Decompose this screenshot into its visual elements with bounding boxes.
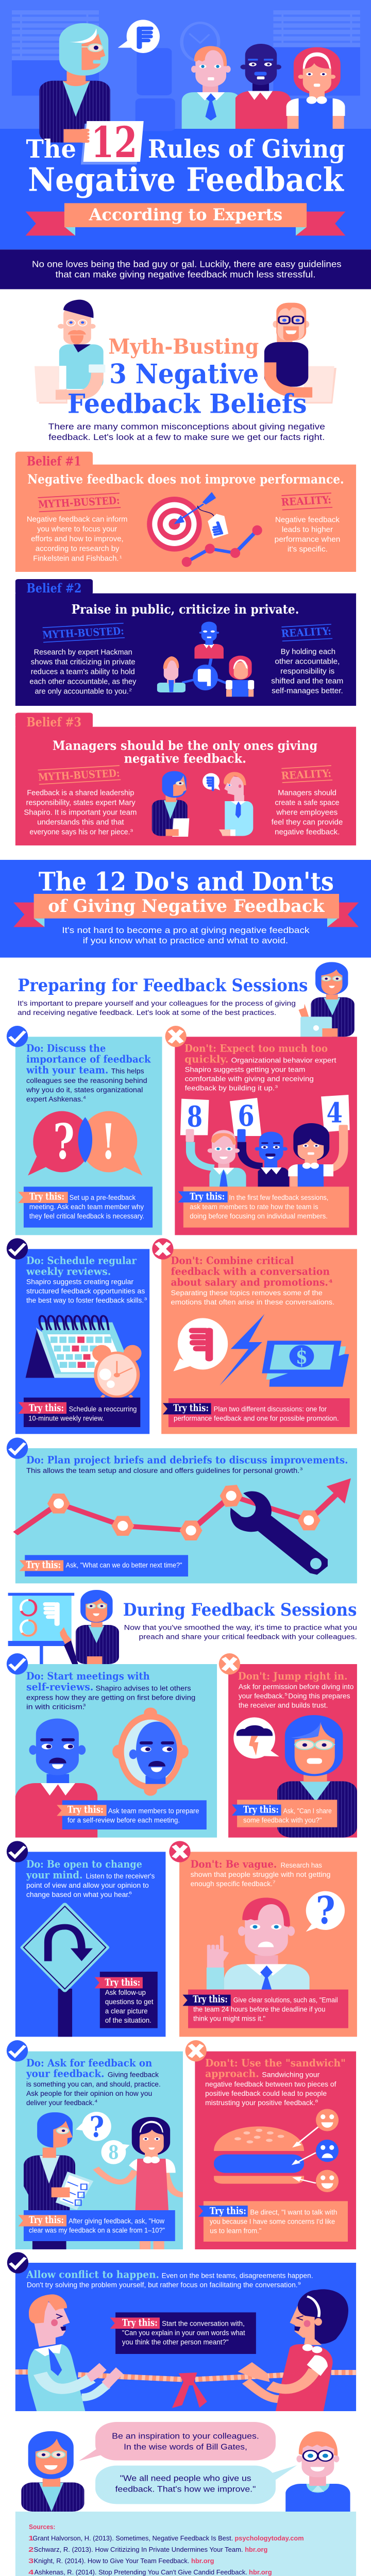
illustration: team and thumbs down <box>157 622 254 697</box>
icon: thumbs down, lightning and money: $ <box>296 1345 308 1369</box>
try this box <box>163 1398 350 1427</box>
card text: feedback by building it up. <box>185 1084 275 1092</box>
try this box: Ask team members to prepare <box>108 1807 199 1815</box>
try this box: Start the conversation with, <box>162 2319 245 2328</box>
card text: 3 <box>144 1297 147 1301</box>
illustration: manager talks with employee <box>152 771 253 837</box>
card text: Do: Discuss the <box>26 1042 106 1055</box>
card text: Research has <box>281 1861 322 1869</box>
card text: Shapiro suggests getting your team <box>185 1065 305 1074</box>
don't badge <box>165 1026 187 1047</box>
try this box: Try this: <box>210 2206 246 2217</box>
card text: Allow conflict to happen. <box>26 2268 159 2281</box>
card text: weekly reviews. <box>26 1265 111 1278</box>
don't badge <box>185 2040 207 2061</box>
reality text: leads to higher <box>282 525 333 534</box>
sources label: Sources: <box>29 2523 55 2531</box>
card text: Do: Ask for feedback on <box>26 2057 152 2069</box>
employee: woman with headband <box>286 47 345 129</box>
try this box: you think the other person meant?" <box>122 2338 229 2346</box>
reality text: where employees <box>276 808 338 817</box>
speech bubble: bill gates quote: "We all need people who give us <box>120 2474 251 2483</box>
card text: why you do it, states organizational <box>26 1086 143 1094</box>
preparing for feedback sessions <box>18 962 355 1039</box>
card text: positive feedback could lead to people <box>205 2090 327 2097</box>
section banner: do's and don'ts <box>0 860 371 958</box>
card text: Shapiro advises to let others <box>96 1684 191 1692</box>
manager with tablet <box>298 962 355 1039</box>
myth-busted text: 2 <box>129 688 132 692</box>
source list: Grant Halvorson, H. (2013). Sometimes, Negative Feedback Is Best. <box>32 2534 233 2542</box>
card text: 3 <box>83 1703 86 1707</box>
card text: 3 <box>300 1467 303 1471</box>
card text: deliver your feedback. <box>26 2099 94 2107</box>
card text <box>26 1858 155 1899</box>
myth-busted text: Shapiro. It is important your team <box>24 808 137 817</box>
card text: the receiver and builds trust. <box>239 1701 328 1709</box>
card text: is something you can, and should, practice. <box>26 2080 161 2088</box>
illustration: confused man <box>207 1888 345 1990</box>
icon: calendar <box>26 1316 133 1378</box>
myth-busted stamp <box>38 493 121 512</box>
card text: 5 <box>284 1692 288 1697</box>
source list: Schwarz, R. (2013). How Critizizing In Private Undermines Your Team. <box>34 2546 243 2553</box>
subtitle ribbon: According to Experts <box>89 206 282 225</box>
reality text: Managers should <box>278 788 336 797</box>
reality text: create a safe space <box>275 798 340 807</box>
section heading: Myth-Busting <box>108 335 259 359</box>
myth-busted text: shows that criticizing in private <box>31 657 136 666</box>
source list: Knight, R. (2014). How to Give Your Team Feedback. <box>34 2557 189 2565</box>
try this box: Try this: <box>29 2214 64 2226</box>
during feedback sessions <box>8 1590 357 1664</box>
speech bubble: inspiration: In the wise words of Bill Gates, <box>124 2443 247 2451</box>
try this box: of the situation. <box>105 2016 151 2024</box>
source list: 3 <box>28 2557 33 2565</box>
card text: Do: Start meetings with <box>26 1670 150 1682</box>
try this box: Set up a pre-feedback <box>70 1194 136 1201</box>
reality stamp <box>281 624 332 641</box>
card: start meetings with self-reviews <box>7 1653 217 1838</box>
try this box: Be direct, "I want to talk with <box>250 2208 337 2216</box>
card text <box>184 1042 336 1092</box>
try this box <box>182 1990 348 2028</box>
try this box: Ask, "Can I share <box>283 1807 332 1815</box>
try this box: questions to get <box>105 1998 154 2006</box>
belief 3 statement <box>53 738 317 766</box>
try this box: "Can you explain in your own words what <box>122 2329 245 2337</box>
belief 3 statement: negative feedback. <box>124 751 246 766</box>
card text: point of view and allow your opinion to <box>26 1882 149 1889</box>
card: sandwich approach <box>185 2040 356 2249</box>
office windows <box>12 10 360 96</box>
card text: 6 <box>129 1891 132 1895</box>
section intro <box>18 999 296 1016</box>
reality text: it's specific. <box>288 545 328 553</box>
myth-busted text: each other accountable, as they <box>29 677 137 686</box>
icon: question and exclamation bubbles: ! <box>102 1114 115 1170</box>
try this box: for a self-review before each meeting. <box>68 1816 180 1824</box>
closing conversation <box>21 2422 350 2512</box>
reality text: By holding each <box>281 647 335 656</box>
icon: storm speech bubble <box>233 1717 279 1758</box>
try this box: Try this: <box>193 1994 228 2005</box>
speech bubble: thumbs down <box>118 20 160 53</box>
try this box <box>95 1972 158 2028</box>
card text <box>26 1042 151 1103</box>
card text: your feedback. <box>26 2067 104 2080</box>
myth-busted text: you where to focus your <box>37 524 117 533</box>
try this box: Try this: <box>190 1191 225 1202</box>
myth-busted text <box>24 788 137 836</box>
reality stamp: REALITY: <box>281 625 332 640</box>
do badge <box>7 1238 28 1260</box>
belief 3 label: Belief #3 <box>26 715 81 730</box>
myth-busted stamp <box>42 623 125 642</box>
section intro: and receiving negative feedback. Let's look at some of the best practices. <box>18 1009 276 1016</box>
main title: The <box>26 134 76 164</box>
card text: structured feedback opportunities as <box>26 1287 145 1295</box>
card: be open to change your mind <box>7 1841 165 2037</box>
reality text <box>275 515 340 553</box>
card text <box>205 2057 346 2107</box>
card text <box>26 2057 161 2107</box>
try this box: After giving feedback, ask, "How <box>69 2217 165 2225</box>
card text: your feedback. <box>239 1692 284 1700</box>
reality text: negative feedback. <box>275 827 340 836</box>
myth-busted text: efforts and how to improve, <box>31 534 124 543</box>
myth-busted text: understands this and that <box>37 818 124 826</box>
reality stamp: REALITY: <box>281 767 332 782</box>
card text: Don't: Combine critical <box>171 1254 294 1266</box>
section intro: There are many common misconceptions about giving negative <box>48 422 325 431</box>
try this box: Schedule a reoccurring <box>69 1405 137 1413</box>
icon: tug of war rope <box>15 2372 356 2379</box>
card text: mistrusting your positive feedback. <box>205 2099 315 2107</box>
illustration: team holding scores: 6 <box>238 1099 255 1132</box>
illustration: arguing man <box>28 2294 123 2411</box>
icon: wrench <box>220 1485 328 1575</box>
card: schedule regular weekly reviews <box>7 1238 149 1434</box>
try this box: Try this: <box>105 1977 140 1988</box>
card text: 7 <box>273 1880 276 1884</box>
wall clock <box>182 23 218 61</box>
icon: speech bubbles <box>76 2110 130 2164</box>
number card: 12: 12 <box>91 118 137 167</box>
card text: 4 <box>83 1095 86 1099</box>
card text: Organizational behavior expert <box>231 1056 336 1064</box>
try this box: Try this: <box>173 1402 209 1414</box>
myth-busted stamp: MYTH-BUSTED: <box>42 624 125 641</box>
try this box <box>18 1398 140 1427</box>
source list: Ashkenas, R. (2014). Stop Pretending You Can't Give Candid Feedback. <box>35 2568 247 2576</box>
try this box <box>18 2210 175 2241</box>
do badge <box>7 1653 28 1674</box>
try this box: Ask follow-up <box>105 1989 146 1996</box>
illustration: manager <box>277 1715 357 1838</box>
card text: with your team. <box>26 1064 108 1076</box>
icon: u-turn road sign <box>23 1905 107 2037</box>
do badge <box>7 2040 28 2061</box>
card text: 4 <box>95 2099 97 2103</box>
source list: psychologytoday.com <box>235 2534 304 2542</box>
card text: Listen to the receiver's <box>86 1872 155 1880</box>
illustration: team holding scores <box>180 1095 350 1187</box>
try this box <box>57 1800 207 1829</box>
myth-busted stamp <box>38 766 121 784</box>
do badge <box>7 1437 28 1459</box>
employee: man with tie <box>182 46 240 129</box>
myth-busted text <box>27 515 127 563</box>
myth-busted text: 3 <box>130 828 133 833</box>
card text: your mind. <box>26 1869 82 1881</box>
icon: alarm clock <box>92 1345 142 1398</box>
card text: Separating these topics removes some of the <box>171 1289 323 1297</box>
panel: belief 3 <box>15 713 356 845</box>
icon: feedback sandwich <box>214 2126 318 2184</box>
speech bubble: inspiration <box>79 2422 276 2461</box>
try this box: think you might miss it." <box>193 2014 265 2023</box>
card: be vague <box>169 1841 357 2037</box>
try this box <box>20 1555 188 1577</box>
don't badge <box>219 1653 240 1674</box>
myth-busted text: responsibility, states expert Mary <box>26 798 136 807</box>
card text <box>26 1454 348 1475</box>
do badge <box>7 1026 28 1047</box>
card text: 8 <box>315 2099 318 2103</box>
try this box: Ask, "What can we do better next time?" <box>66 1561 182 1569</box>
icon: rope knot <box>172 2372 207 2408</box>
card text: self-reviews. <box>26 1681 93 1693</box>
don't badge <box>152 1238 174 1260</box>
section heading <box>68 335 307 419</box>
card text: Don't: Be vague. <box>191 1858 277 1870</box>
belief 1 label: Belief #1 <box>27 454 81 468</box>
source list: 4 <box>28 2568 33 2576</box>
myth-busted text: 1 <box>119 555 122 559</box>
section intro <box>124 1623 357 1641</box>
source list: 2 <box>28 2546 33 2553</box>
card text: This helps <box>111 1067 144 1075</box>
banner ribbon <box>13 894 359 927</box>
flip chart <box>8 1593 74 1664</box>
try this box <box>178 1187 349 1228</box>
try this box: meeting. Ask each team member why <box>29 1203 144 1211</box>
card text: expert Ashkenas. <box>26 1095 83 1103</box>
illustration: arguing woman <box>238 2289 348 2411</box>
myth-busted stamp: MYTH-BUSTED: <box>38 494 120 511</box>
myth-busted text: Finkelstein and Fishbach. <box>33 554 119 563</box>
icon: question and exclamation bubbles <box>28 1111 142 1176</box>
reality stamp <box>281 766 332 783</box>
intro band and myth-busting heading <box>0 249 371 442</box>
reality text: Negative feedback <box>275 515 340 524</box>
try this box <box>110 2312 256 2354</box>
card text: Giving feedback <box>108 2071 159 2079</box>
speech bubble: inspiration: Be an inspiration to your colleagues. <box>112 2432 259 2441</box>
do badge <box>7 1841 28 1862</box>
try this box: Try this: <box>29 1191 64 1202</box>
card: expect too much too quickly <box>165 1026 357 1235</box>
card: plan project briefs and debriefs <box>7 1437 357 1583</box>
card text: the best way to foster feedback skills. <box>26 1296 144 1304</box>
card text: Shapiro suggests creating regular <box>26 1278 133 1286</box>
card text <box>26 2268 313 2289</box>
panel: belief 1 <box>15 452 356 572</box>
card text: enough specific feedback. <box>191 1880 273 1888</box>
character: bill gates <box>285 2431 350 2512</box>
character: man with glasses <box>264 303 336 403</box>
card text: in with criticism. <box>26 1703 85 1711</box>
source list <box>28 2534 304 2576</box>
employee: bald man in red sweater <box>235 44 291 129</box>
reality stamp: REALITY: <box>281 494 332 509</box>
belief 2 label: Belief #2 <box>26 581 81 596</box>
card: combine critical feedback with salary talk <box>152 1238 357 1434</box>
try this box: they feel critical feedback is necessary. <box>29 1212 144 1220</box>
myth-busted text: are only accountable to you. <box>35 687 129 696</box>
character: manager smiling <box>21 2431 84 2512</box>
character: man with beret <box>35 300 105 403</box>
subtitle ribbon <box>26 203 345 235</box>
myth-busted text: everyone says his or her piece. <box>29 827 130 836</box>
card text <box>26 1670 195 1711</box>
reality text <box>272 788 343 836</box>
card text: express how they are getting on first before diving <box>26 1693 195 1702</box>
icon: question and exclamation bubbles: ? <box>53 1114 75 1170</box>
try this box: us to learn from." <box>210 2227 261 2235</box>
illustration: team holding scores: 4 <box>327 1097 343 1129</box>
myth-busted text: Research by expert Hackman <box>34 648 132 656</box>
card text: comfortable with giving and receiving <box>185 1075 314 1083</box>
try this box <box>18 1187 153 1228</box>
banner text: if you know what to practice and what to avoid. <box>83 936 288 945</box>
chart: rising line with nuts <box>15 1478 351 1540</box>
card text: Even on the best teams, disagreements happen. <box>162 2272 313 2280</box>
try this box <box>232 1800 337 1827</box>
try this box: some feedback with you?" <box>243 1816 322 1824</box>
card text: 4 <box>328 1279 333 1284</box>
banner text: It's not hard to become a pro at giving negative feedback <box>62 926 310 935</box>
myth-busted text: Negative feedback can inform <box>27 515 127 523</box>
header illustration and title <box>0 0 371 249</box>
card text: 3 <box>275 1084 278 1089</box>
reality text: feel they can provide <box>272 818 343 826</box>
icon: thumbs down, lightning and money <box>174 1314 349 1387</box>
icon: speech bubbles: ? <box>90 2110 104 2144</box>
reality text: other accountable, <box>275 657 340 666</box>
section intro <box>48 422 325 442</box>
card text <box>171 1254 334 1306</box>
section intro: It's important to prepare yourself and your colleagues for the process of giving <box>18 999 296 1007</box>
manager woman <box>39 23 110 143</box>
try this box: a clear picture <box>105 2007 148 2015</box>
banner text <box>62 926 310 945</box>
myth-busted text: reduces a team's ability to hold <box>31 667 135 676</box>
illustration: confused man: ? <box>316 1888 335 1933</box>
card text <box>238 1670 353 1709</box>
card text: Do: Be open to change <box>26 1858 142 1870</box>
reality text: shifted and the team <box>271 676 343 685</box>
reality text: responsibility is <box>280 667 334 675</box>
try this box: Try this: <box>243 1804 279 1815</box>
try this box: clear was my feedback on a scale from 1–10?" <box>29 2226 165 2234</box>
try this box: Try this: <box>26 1560 61 1570</box>
reality text: self-manages better. <box>272 686 343 695</box>
source list: hbr.org <box>191 2557 214 2565</box>
intro text <box>32 259 342 279</box>
card text: Do: Schedule regular <box>26 1254 137 1266</box>
try this box: Try this: <box>122 2317 158 2329</box>
card text: importance of feedback <box>26 1053 151 1065</box>
icon: smiley faces <box>316 2109 339 2192</box>
icon: target with arrow, tag and chart <box>147 492 262 567</box>
card text: change based on what you hear. <box>26 1891 130 1899</box>
speech bubble: bill gates quote: feedback. That's how we improve." <box>115 2485 256 2494</box>
card text: Sandwiching your <box>262 2071 320 2079</box>
icon: speech bubbles: 8 <box>108 2142 119 2164</box>
illustration: team holding scores: 8 <box>187 1100 203 1133</box>
myth-busted stamp: MYTH-BUSTED: <box>38 767 120 783</box>
try this box: Try this: <box>29 1402 64 1414</box>
sources panel <box>15 2512 363 2576</box>
card: ask for feedback on your feedback <box>7 2040 183 2249</box>
illustration: employee with headband <box>96 2117 183 2249</box>
water cooler <box>136 48 175 131</box>
source list: hbr.org <box>249 2568 272 2576</box>
speech bubble: bill gates quote <box>95 2465 297 2504</box>
card text: approach. <box>205 2067 259 2080</box>
card text: 9 <box>298 2281 301 2285</box>
section heading: 3 Negative <box>109 358 259 389</box>
card text: Ask people for their opinion on how you <box>26 2090 152 2097</box>
myth-busted text: according to research by <box>36 544 120 553</box>
myth-busted text <box>29 648 137 696</box>
illustration: manager with clipboard <box>24 2112 93 2249</box>
card: jump right in <box>219 1653 357 1838</box>
reality text <box>271 647 343 695</box>
card text <box>26 1254 147 1304</box>
try this box: 10-minute weekly review. <box>28 1414 104 1422</box>
card: allow conflict to happen <box>7 2252 356 2411</box>
main title <box>26 134 345 199</box>
source list: 1 <box>28 2534 33 2542</box>
myth-busted text: Feedback is a shared leadership <box>27 788 134 797</box>
card text <box>191 1858 330 1888</box>
card text: quickly. <box>184 1053 229 1065</box>
panel: belief 2 <box>15 579 356 706</box>
try this box: Try this: <box>68 1804 104 1816</box>
source list: hbr.org <box>245 2546 267 2553</box>
don't badge <box>169 1841 191 1862</box>
presenter <box>60 1590 119 1664</box>
illustration: man looks at himself <box>15 1707 189 1838</box>
reality text: performance when <box>275 535 340 544</box>
try this box <box>198 2201 348 2242</box>
number card: 12 <box>64 118 144 167</box>
card text: colleagues see the reasoning behind <box>26 1077 147 1084</box>
reality stamp <box>281 493 332 510</box>
card: discuss the importance of feedback <box>7 1026 162 1235</box>
do badge <box>7 2252 28 2274</box>
